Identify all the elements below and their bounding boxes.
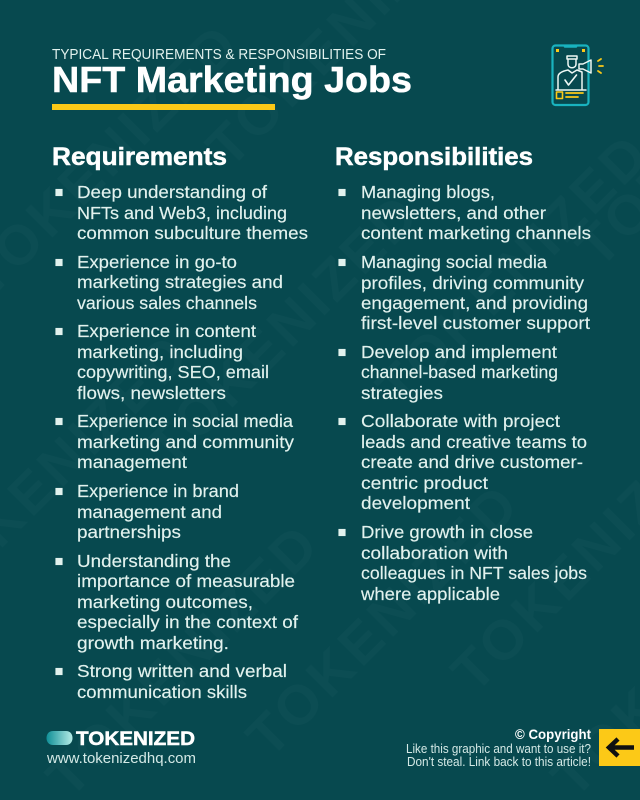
requirement list: Deep understanding of: [77, 182, 267, 202]
responsibility list: development: [361, 493, 470, 513]
requirement list: common subculture themes: [77, 223, 308, 243]
requirement list: various sales channels: [77, 293, 257, 313]
responsibility list: newsletters, and other: [361, 203, 546, 223]
icon: phone with marketer and megaphone: [552, 46, 603, 105]
responsibility list: channel-based marketing: [361, 362, 558, 382]
heading: responsibilities: Responsibilities: [335, 143, 533, 171]
requirement list: Understanding the: [77, 551, 231, 571]
copyright notice: © Copyright: [515, 726, 591, 742]
icon: logo pill: [46, 731, 72, 745]
requirement list: Experience in social media: [77, 411, 293, 431]
requirement list: partnerships: [77, 522, 181, 542]
copyright notice: [406, 726, 591, 769]
requirement list: copywriting, SEO, email: [77, 362, 269, 382]
responsibility list: content marketing channels: [361, 223, 591, 243]
responsibility list: colleagues in NFT sales jobs: [361, 563, 587, 583]
responsibility list: where applicable: [360, 584, 500, 604]
logo wordmark: TOKENIZED: [76, 729, 195, 750]
requirement list: flows, newsletters: [77, 383, 226, 403]
responsibility list: engagement, and providing: [361, 293, 588, 313]
title: NFT Marketing Jobs: [52, 59, 412, 100]
requirement list: Strong written and verbal: [77, 661, 287, 681]
responsibility list: [338, 182, 591, 604]
requirement list: marketing outcomes,: [77, 592, 253, 612]
responsibility list: collaboration with: [361, 543, 508, 563]
background watermark: TOKENIZED: [134, 180, 432, 478]
requirement list: marketing strategies and: [77, 272, 283, 292]
requirement list: growth marketing.: [77, 633, 229, 653]
responsibility list: Managing blogs,: [361, 182, 495, 202]
requirement list: Experience in brand: [77, 481, 239, 501]
requirement list: management: [77, 452, 187, 472]
requirement list: NFTs and Web3, including: [77, 203, 287, 223]
responsibility list: centric product: [361, 473, 488, 493]
panel: requirements: [52, 143, 308, 702]
heading: requirements: Requirements: [52, 143, 227, 171]
requirement list: importance of measurable: [77, 571, 295, 591]
website url: www.tokenizedhq.com: [46, 750, 196, 767]
arrow button: [599, 729, 640, 766]
background watermark: TOKENIZED: [234, 470, 532, 768]
responsibility list: Develop and implement: [361, 342, 557, 362]
responsibility list: Collaborate with project: [361, 411, 560, 431]
requirement list: [56, 182, 308, 702]
responsibility list: Drive growth in close: [361, 522, 533, 542]
requirement list: communication skills: [77, 682, 247, 702]
title underline: [52, 104, 275, 110]
requirement list: marketing, including: [77, 342, 243, 362]
requirement list: management and: [77, 502, 222, 522]
subtitle: TYPICAL REQUIREMENTS & RESPONSIBILITIES OF: [52, 46, 386, 63]
logo: tokenized: [46, 729, 195, 750]
copyright notice: Don't steal. Link back to this article!: [407, 755, 591, 769]
responsibility list: create and drive customer-: [361, 452, 583, 472]
copyright notice: Like this graphic and want to use it?: [406, 742, 591, 756]
panel: responsibilities: [335, 143, 591, 604]
responsibility list: leads and creative teams to: [361, 432, 587, 452]
requirement list: especially in the context of: [77, 612, 298, 632]
responsibility list: strategies: [361, 383, 443, 403]
requirement list: marketing and community: [77, 432, 294, 452]
requirement list: Experience in go-to: [77, 252, 237, 272]
responsibility list: first-level customer support: [361, 313, 590, 333]
background watermark: TOKENIZED: [34, 510, 332, 800]
responsibility list: profiles, driving community: [361, 273, 584, 293]
responsibility list: Managing social media: [361, 252, 547, 272]
requirement list: Experience in content: [77, 321, 256, 341]
